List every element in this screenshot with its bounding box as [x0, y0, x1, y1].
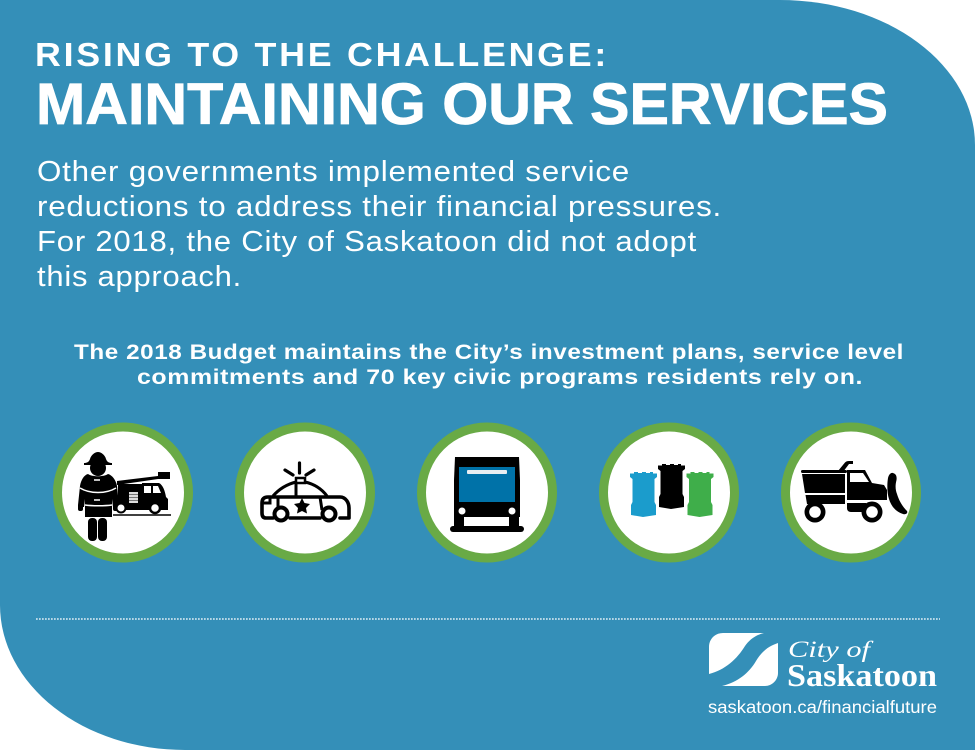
website url: saskatoon.ca/financialfuture [708, 697, 937, 717]
intro paragraph: For 2018, the City of Saskatoon did not adopt [37, 226, 697, 258]
star [294, 498, 310, 514]
icon: snow plow truck [786, 427, 916, 558]
car body outline [262, 497, 349, 518]
logo wordmark: City of [788, 637, 875, 662]
intro paragraph: this approach. [37, 261, 242, 293]
intro paragraph: reductions to address their financial pressures. [37, 191, 722, 223]
budget statement: commitments and 70 key civic programs residents rely on. [137, 366, 863, 389]
firefighter figure [78, 452, 119, 541]
icon: city bus [422, 427, 552, 558]
wheels [274, 508, 288, 520]
logo: City of Saskatoon: Saskatoon [787, 657, 937, 693]
intro paragraph [37, 156, 722, 293]
main title: MAINTAINING OUR SERVICES [36, 72, 888, 137]
beacon [296, 478, 305, 483]
fire truck [113, 472, 171, 515]
logo: City of Saskatoon [709, 633, 937, 693]
budget statement: The 2018 Budget maintains the City’s investment plans, service level [74, 341, 904, 364]
intro paragraph: Other governments implemented service [37, 156, 630, 188]
icon: police car [240, 427, 370, 558]
icon: firefighter and fire truck [58, 427, 188, 558]
icon: waste carts [604, 427, 734, 558]
eyebrow heading: RISING TO THE CHALLENGE: [35, 36, 609, 73]
logo mark [709, 633, 764, 674]
dotted divider [36, 618, 940, 620]
budget statement [74, 341, 904, 389]
